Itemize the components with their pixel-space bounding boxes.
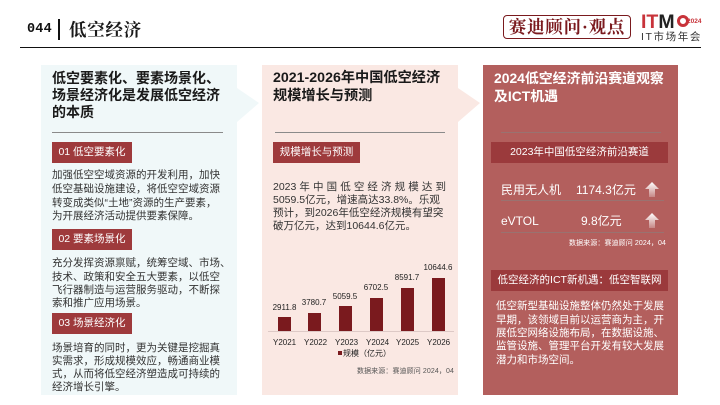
panel heading: 2021-2026年中国低空经济 (273, 70, 440, 86)
panel heading: 规模增长与预测 (273, 88, 372, 104)
heading rule (275, 132, 445, 133)
text block 03: 经济增长引擎。 (52, 381, 126, 393)
heading rule (501, 132, 661, 133)
text block 03: 式，从而将低空经济塑造成可持续的 (52, 368, 220, 380)
tag 01 (52, 142, 132, 163)
text block 02 (52, 257, 230, 308)
text block 02: 技术、政策和安全五大要素，以低空 (52, 270, 220, 282)
text block 03: 场景培育的同时，更为关键是挖掘真 (52, 342, 220, 354)
row: eVTOL (501, 213, 659, 228)
logo circle (677, 15, 689, 27)
x axis labels: Y2024 (366, 338, 389, 347)
text block 03: 实需求，形成规模效应，畅通商业模 (52, 355, 220, 367)
text block: ICT opportunity: 展低空网络设施布局，在数据设施、 (496, 327, 664, 339)
row value: 9.8亿元 (581, 214, 622, 228)
column 2025 (401, 288, 414, 331)
panel background with arrow (41, 65, 258, 395)
column 2021 (278, 317, 290, 331)
panel heading: 及ICT机遇 (494, 88, 558, 104)
bar Y2026 (424, 263, 452, 331)
panel heading (494, 70, 664, 104)
tag: 规模增长与预测 (280, 146, 353, 158)
panel heading: 2024低空经济前沿赛道观察 (494, 70, 664, 86)
tag 02 (52, 229, 132, 250)
bar Y2024 (364, 283, 388, 331)
x axis labels: Y2023 (335, 338, 358, 347)
panel: frontier tracks and ICT opportunity (483, 65, 678, 395)
band: frontier tracks: 2023年中国低空经济前沿赛道 (510, 146, 649, 158)
row rule (501, 200, 664, 201)
text block: ICT opportunity: 早期，该领域目前以运营商为主，开 (496, 314, 664, 326)
icon: up arrow (645, 182, 659, 197)
text block 02: 飞行器制造与运营服务驱动，不断探 (52, 284, 220, 296)
text block 02: 索和推广应用场景。 (52, 296, 146, 308)
text block 01: 转变成类似“土地”资源的生产要素， (52, 196, 216, 208)
header rule (20, 47, 701, 48)
row label: 民用无人机 (501, 183, 561, 197)
x axis labels: Y2022 (304, 338, 327, 347)
heading rule (52, 132, 223, 133)
text block: market summary: 破万亿元，达到10644.6亿元。 (273, 220, 416, 232)
panel heading: 低空要素化、要素场景化、 (52, 70, 220, 86)
value 3780.7: 3780.7 (302, 298, 326, 307)
x axis labels: Y2025 (396, 338, 419, 347)
text block: ICT opportunity: 低空新型基础设施整体仍然处于发展 (496, 300, 664, 312)
band: frontier tracks (491, 142, 668, 163)
column 2022 (308, 313, 320, 331)
bar Y2023 (333, 292, 357, 331)
x axis labels: Y2021 (273, 338, 296, 347)
tag 02: 02 要素场景化 (58, 233, 126, 245)
header separator bar (58, 19, 60, 40)
panel heading: 的本质 (52, 104, 94, 120)
chart legend: 规模（亿元） (343, 349, 391, 358)
chart baseline (268, 331, 454, 332)
panel heading (52, 70, 220, 120)
row label: eVTOL (501, 214, 539, 228)
text block: ICT opportunity: 潜力和市场空间。 (496, 354, 580, 366)
tag 03: 03 场景经济化 (58, 317, 126, 329)
column 2026 (432, 278, 444, 331)
data source: 数据来源：赛迪顾问 2024，04 (357, 368, 454, 375)
badge: viewpoint: 赛迪顾问·观点 (509, 17, 625, 37)
value 8591.7: 8591.7 (395, 273, 419, 282)
text block 02: 充分发挥资源禀赋，统筹空域、市场、 (52, 257, 230, 269)
column 2023 (339, 306, 352, 331)
band: ICT opportunity (491, 270, 668, 291)
text block 01 (52, 169, 220, 222)
text block: market summary (273, 181, 446, 232)
logo year: 2024 (687, 18, 701, 25)
text block: ICT opportunity: 监管设施、管理平台开发有较大发展 (496, 340, 664, 352)
text block 01: 为开展经济活动提供要素保障。 (52, 210, 199, 222)
logo: ITMC 2024 (641, 11, 702, 43)
column 2024 (370, 298, 382, 331)
tag 03 (52, 313, 132, 334)
bar Y2025 (395, 273, 419, 331)
text block 03 (52, 342, 220, 393)
logo caption: IT市场年会 (641, 31, 702, 43)
panel: market size 2021-2026 (262, 65, 480, 395)
tag 01: 01 低空要素化 (58, 146, 126, 158)
panel background with arrow (262, 65, 480, 395)
tag (273, 142, 360, 163)
data source: 数据来源：赛迪顾问 2024，04 (569, 240, 666, 247)
icon: up arrow (645, 213, 659, 228)
row value: 1174.3亿元 (576, 183, 636, 197)
text block: market summary: 2023 年 中 国 低 空 经 济 规 模 达 到 (273, 181, 446, 193)
text block: market summary: 5059.5亿元，增速高达33.8%。乐观 (273, 194, 440, 206)
value 6702.5: 6702.5 (364, 283, 388, 292)
bar Y2021 (273, 303, 296, 331)
row rule (501, 232, 664, 233)
text block 01: 加强低空空域资源的开发利用，加快 (52, 169, 220, 181)
panel heading: 场景经济化是发展低空经济 (52, 87, 220, 103)
text block: ICT opportunity (496, 300, 664, 366)
value 10644.6: 10644.6 (424, 263, 452, 272)
x axis labels: Y2026 (427, 338, 450, 347)
x axis labels (273, 338, 450, 347)
text block 01: 低空基础设施建设，将低空空域资源 (52, 183, 220, 195)
value 5059.5: 5059.5 (333, 292, 357, 301)
text block: market summary: 预计，到2026年低空经济规模有望突 (273, 207, 443, 219)
page number: 044 (27, 22, 52, 37)
logo letters: ITM (641, 11, 675, 33)
row: civil drones (501, 182, 659, 197)
section title: 低空经济 (69, 20, 142, 40)
bar Y2022 (302, 298, 326, 331)
bar chart (268, 263, 454, 375)
band: ICT opportunity: 低空经济的ICT新机遇：低空智联网 (498, 274, 661, 286)
panel: essence of the low-altitude economy (41, 65, 258, 395)
panel heading (273, 70, 440, 104)
value 2911.8: 2911.8 (273, 303, 296, 312)
